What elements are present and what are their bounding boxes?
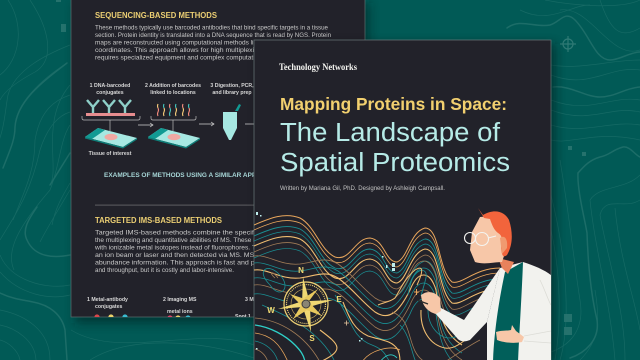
text block: sequencing description: section. Protein identity is translated into a DNA sequence that is read by NGS. Protein — [95, 32, 332, 39]
step labels: IMS workflow: 1 Metal-antibody — [87, 297, 128, 303]
arrow: step 1 to 2 — [138, 123, 153, 127]
text block: targeted IMS description: the multiplexing and quantitative abilities of MS. These methods label antibodies — [95, 237, 325, 244]
heading: sequencing-based methods: SEQUENCING-BASED METHODS — [95, 11, 217, 20]
text block: sequencing description: requires specialized equipment and complex computational analysis workflows. — [95, 54, 325, 62]
arm — [435, 268, 500, 341]
step labels: IMS workflow: metal ions — [167, 309, 193, 315]
text block: sequencing description — [95, 24, 332, 62]
text block: targeted IMS description: abundance information. This approach is fast and provides high resolution — [95, 260, 326, 266]
icon: compass rose — [267, 266, 342, 343]
second hand — [496, 325, 524, 343]
icon: compass rose: W — [267, 306, 275, 315]
step labels: IMS workflow — [87, 297, 254, 317]
step labels: sequencing workflow: 2 Addition of barcodes — [145, 83, 201, 89]
icon: small map markers — [256, 212, 419, 350]
step labels: sequencing workflow: 3 Digestion, PCR, — [210, 83, 254, 89]
coat folds — [524, 280, 551, 343]
icon: compass rose: E — [336, 295, 342, 304]
arrow: step 2 to 3 — [199, 122, 214, 126]
step labels: IMS workflow: Spot 1 — [235, 314, 251, 320]
neck — [500, 259, 514, 274]
title: Spatial Proteomics: Spatial Proteomics — [280, 149, 510, 177]
step labels: sequencing workflow: 1 DNA-barcoded — [90, 83, 130, 89]
hand with pen — [421, 292, 441, 314]
step labels: sequencing workflow: conjugates — [96, 90, 124, 96]
step labels: IMS workflow: 3 MS — [245, 297, 258, 303]
text block: targeted IMS description: and throughput, but it is costly and labor-intensive. — [95, 267, 234, 274]
arrow: step 3 onward — [245, 124, 254, 125]
coat body — [487, 262, 552, 360]
shirt — [493, 262, 523, 360]
ear — [500, 237, 507, 254]
hair — [478, 208, 512, 256]
text block: sequencing description: These methods typically use barcoded antibodies that bind specific targets in a tissue — [95, 24, 329, 32]
text block: sequencing description: coordinates. This approach allows for high multiplexing and sensitivity, but it — [95, 47, 325, 54]
glasses — [464, 232, 496, 246]
illustration: scientist — [417, 208, 552, 360]
step labels: IMS workflow: conjugates — [95, 304, 122, 310]
text block: targeted IMS description — [95, 230, 254, 274]
step labels: sequencing workflow: and library prep — [212, 90, 252, 96]
icon: antibodies on tissue slide — [82, 100, 140, 148]
lower left cyan contours — [255, 325, 305, 360]
heading: targeted IMS-based methods: TARGETED IMS-BASED METHODS — [95, 216, 222, 225]
heading: examples of methods: EXAMPLES OF METHODS USING A SIMILAR APPROACH — [104, 172, 280, 179]
icon: metal ion dots — [94, 314, 190, 317]
chart: contour map illustration — [254, 216, 500, 360]
title: The Landscape of: The Landscape of — [280, 119, 501, 147]
step labels: IMS workflow: 2 Imaging MS — [163, 297, 197, 303]
icon: sample tube — [223, 104, 241, 140]
pen — [417, 300, 428, 304]
text block: sequencing description: maps are reconstructed using computational methods linking barcodes to spatial — [95, 40, 325, 46]
label: tissue of interest: Tissue of interest — [89, 151, 132, 157]
panel: front cover — [254, 40, 555, 360]
title: Mapping Proteins in Space: Mapping Proteins in Space: — [280, 94, 507, 114]
text block: targeted IMS description: an ion beam or laser and then detected via MS. MS signals provide spatial — [95, 252, 325, 259]
logo: Technology Networks: Technology Networks — [279, 63, 357, 73]
byline: Written by Mariana Gil, PhD. Designed by Ashleigh Campsall. — [280, 186, 445, 192]
icon: compass rose: N — [298, 266, 304, 275]
icon: barcodes on tissue slide — [148, 104, 200, 148]
step labels: sequencing workflow: linked to locations — [150, 90, 196, 96]
text block: targeted IMS description: with ionizable metal isotopes instead of fluorophores. The tags are released by — [94, 244, 326, 252]
text block: targeted IMS description: Targeted IMS-based methods combine the specificity of antibodies with — [95, 230, 326, 236]
face — [470, 216, 506, 263]
panel: back page — [71, 0, 369, 323]
icon: compass rose: S — [309, 334, 315, 343]
step labels: sequencing workflow — [90, 83, 254, 96]
right contours by the hand — [408, 270, 426, 296]
